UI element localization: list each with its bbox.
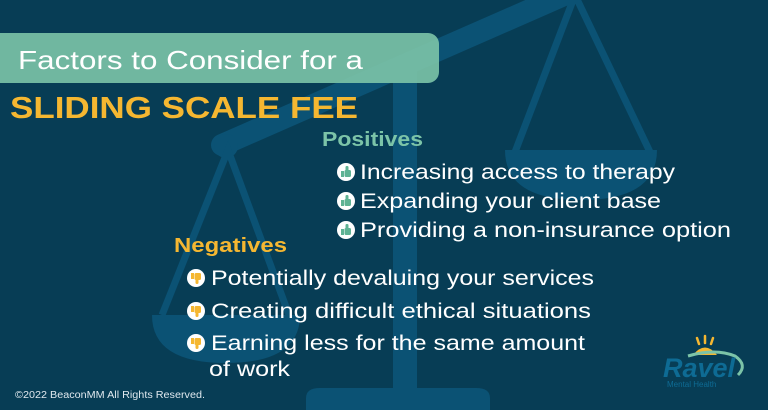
copyright: ©2022 BeaconMM All Rights Reserved. [15, 390, 205, 401]
positives list: Expanding your client base [360, 190, 661, 213]
negatives list: of work [209, 358, 291, 381]
scale illustration [152, 0, 657, 410]
positives list: Providing a non-insurance option [360, 219, 731, 242]
title box: Factors to Consider for a [18, 45, 364, 75]
heading: positives: Positives [322, 129, 423, 151]
heading: negatives: Negatives [174, 235, 287, 257]
logo: Ravel Mental Health: Mental Health [667, 380, 716, 389]
negatives list: Earning less for the same amount [211, 332, 585, 355]
positives list [337, 161, 731, 242]
heading: sliding scale fee: SLIDING SCALE FEE [10, 90, 358, 125]
logo: Ravel Mental Health: Ravel [663, 353, 736, 383]
negatives list: Creating difficult ethical situations [211, 300, 591, 323]
positives list: Increasing access to therapy [360, 161, 676, 184]
title box [0, 33, 439, 83]
logo: Ravel Mental Health [663, 336, 742, 389]
negatives list [187, 267, 594, 381]
negatives list: Potentially devaluing your services [211, 267, 594, 290]
